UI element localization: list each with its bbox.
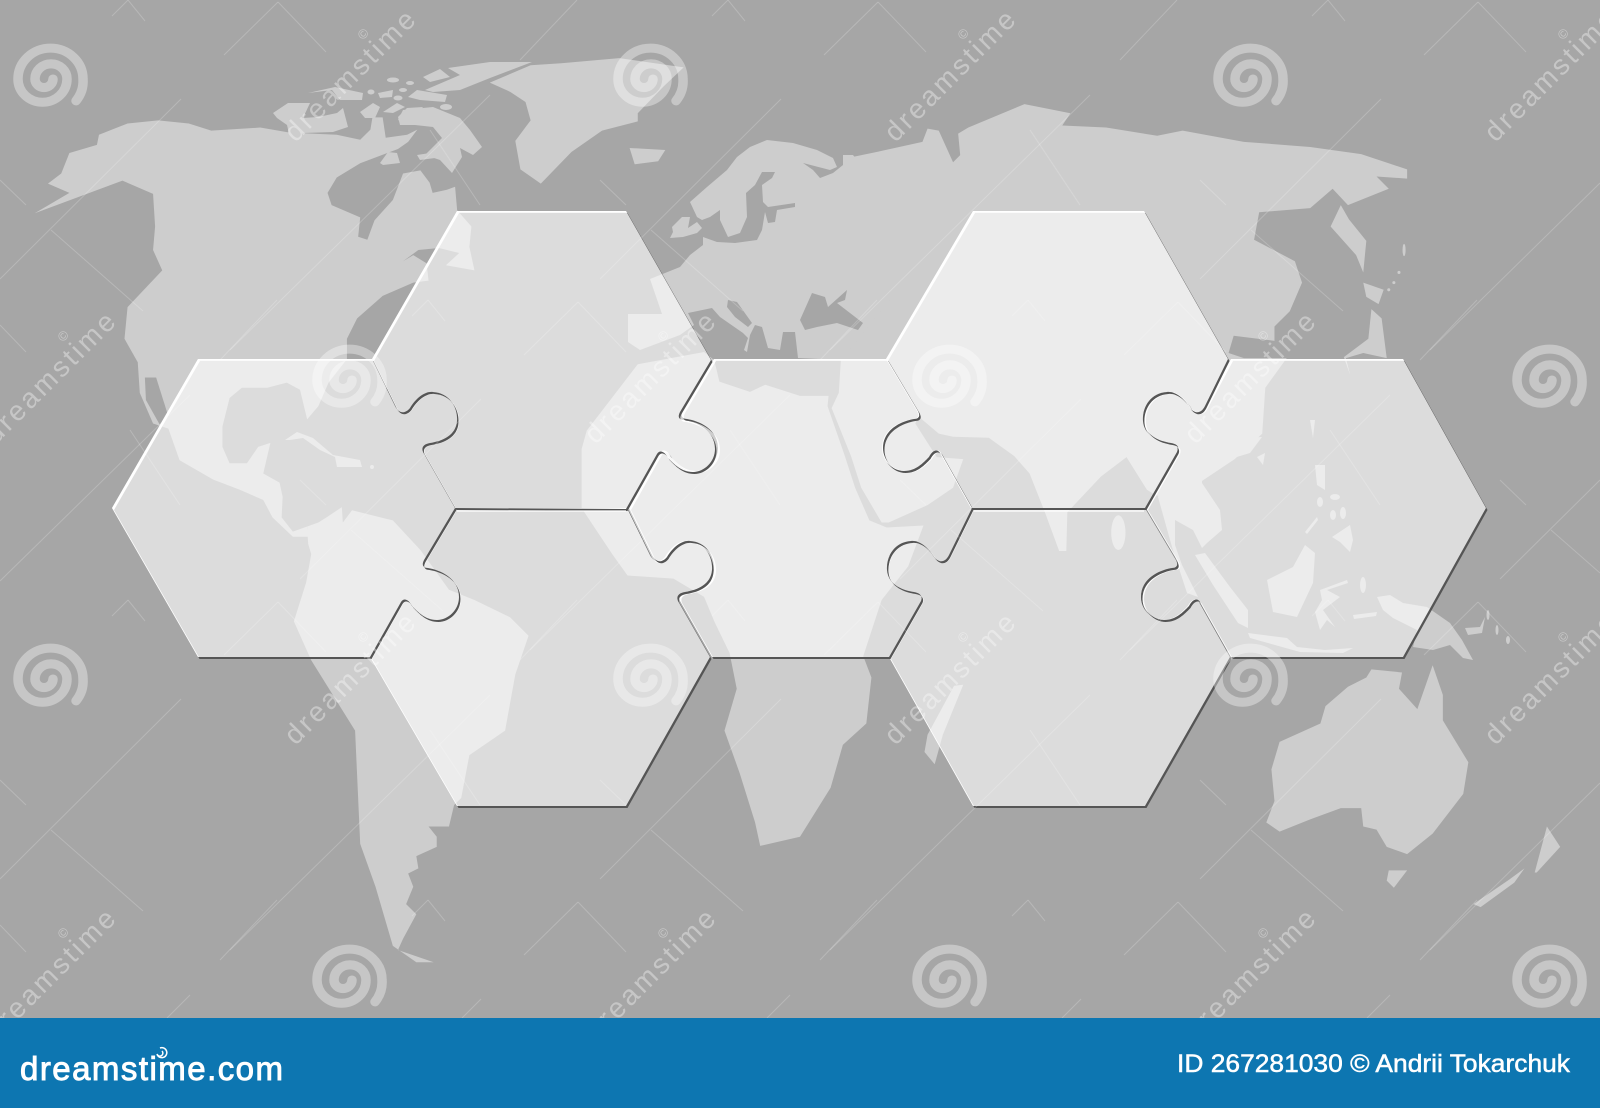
watermark text: dreamstime [878, 4, 1021, 147]
continent: Australia [1266, 665, 1468, 854]
island: Greenland [490, 58, 684, 184]
continents: Americas, Greenland, Asia, Africa, Australia [35, 58, 1560, 962]
islands: New Zealand [1473, 827, 1560, 907]
footer band [0, 1018, 1600, 1108]
islands: South-East Asia [1195, 420, 1510, 660]
watermark text: dreamstime [1178, 306, 1321, 449]
watermark text: © [1554, 628, 1572, 646]
sea: Adriatic [727, 300, 752, 327]
puzzle piece 1: far left hexagon [112, 359, 459, 657]
watermark text: © [1554, 25, 1572, 43]
puzzle piece 3: lower left hexagon [370, 508, 712, 806]
watermark text: © [354, 628, 372, 646]
islands: Sakhalin, Japan, Kurils [1331, 205, 1406, 374]
watermark text: © [954, 25, 972, 43]
island: Cuba and Hispaniola [285, 432, 374, 469]
islands: British Isles [670, 217, 702, 238]
continent: Africa [582, 352, 923, 846]
watermark text: dreamstime [278, 607, 421, 750]
island: Sri Lanka [1111, 515, 1126, 550]
sea: Black Sea [800, 290, 863, 330]
continent: South America [294, 507, 529, 962]
watermark text: dreamstime [1178, 903, 1321, 1046]
puzzle piece 4: centre hexagon [629, 359, 972, 657]
island: Tasmania [1387, 870, 1407, 888]
watermark text: © [654, 924, 672, 942]
puzzle piece 5: upper right hexagon [882, 211, 1228, 508]
continent: Asia [832, 104, 1407, 551]
watermark text: dreamstime [278, 4, 421, 147]
watermark text: © [954, 628, 972, 646]
island: Iceland [630, 148, 665, 164]
watermark text: dreamstime [578, 903, 721, 1046]
watermark text: © [654, 327, 672, 345]
continent: Europe [628, 140, 890, 360]
island: Madagascar [924, 685, 963, 764]
watermark text: © [54, 327, 72, 345]
sea: Gulf of California [145, 378, 168, 426]
watermark text: © [354, 25, 372, 43]
puzzle piece 6: lower right hexagon [887, 508, 1230, 806]
puzzle piece 7: far right hexagon [1142, 359, 1486, 657]
region: Indochina and Malay peninsula [1158, 437, 1262, 597]
puzzle piece 2: upper left hexagon [372, 211, 715, 509]
image id and credit: ID 267281030 © Andrii Tokarchuk [1177, 1050, 1571, 1078]
world map [35, 58, 1560, 962]
footer logo: dreamstime.com [20, 1050, 283, 1087]
watermark text: © [1254, 924, 1272, 942]
watermark text: dreamstime [878, 607, 1021, 750]
watermark text: © [54, 924, 72, 942]
hexagon puzzle [112, 211, 1486, 806]
continent: North America [35, 117, 474, 537]
watermark text: © [1254, 327, 1272, 345]
puzzle shadow edges [112, 211, 1486, 806]
islands: Canadian Arctic [273, 62, 532, 173]
watermark text: dreamstime [578, 306, 721, 449]
